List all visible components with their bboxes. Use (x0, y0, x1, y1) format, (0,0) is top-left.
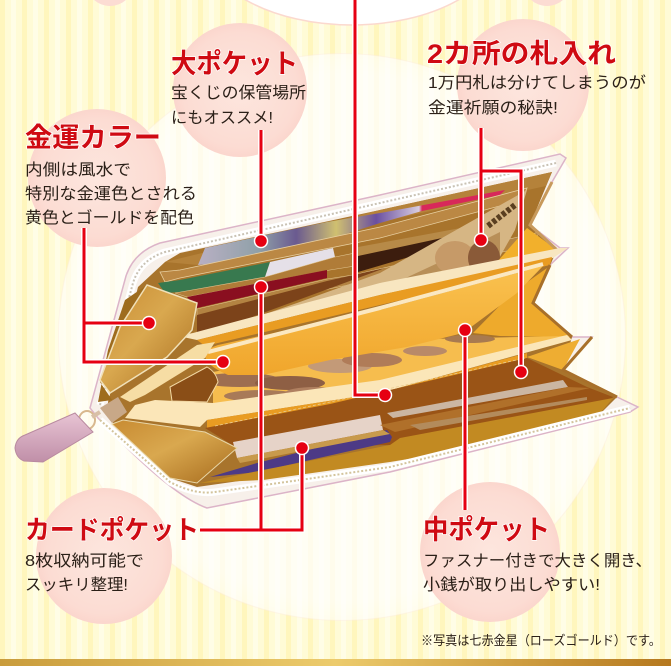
cream stripe lower (125, 335, 572, 427)
pink circle: middle pocket (420, 482, 560, 622)
orange stripe (197, 257, 552, 346)
pocket strip three (197, 232, 540, 316)
text: middle pocket: ファスナー付きで大きく開き、 (423, 552, 652, 570)
heading: card pockets: カードポケット (25, 515, 199, 545)
middle pocket cream edge (178, 248, 568, 340)
text: bill compartments: 金運祈願の秘訣! (428, 99, 558, 117)
gold flap lower (112, 420, 237, 483)
wallet outer body (90, 154, 638, 508)
pink circle: card pockets (36, 488, 172, 624)
yellow gusset upper (497, 228, 557, 262)
gold strip behind red card (175, 248, 380, 297)
callout line: card pockets (200, 280, 308, 530)
coins (200, 335, 495, 402)
lower stitching (215, 358, 525, 426)
text: card pockets (25, 552, 144, 594)
zipper pull tab (15, 411, 100, 462)
orange stripe lower (207, 353, 527, 428)
callout line: coin pocket (355, 0, 392, 402)
green card (158, 262, 270, 293)
lower yellow gusset (527, 339, 580, 370)
text: gold colour (25, 161, 197, 227)
cards (158, 248, 380, 308)
brown pocket (197, 268, 385, 335)
text: gold colour: 内側は風水で (25, 161, 131, 179)
text: card pockets: 8枚収納可能で (25, 552, 144, 570)
large white circle backdrop (58, 53, 626, 621)
top pale circle (202, 0, 502, 25)
zipper bottom (100, 408, 630, 493)
top gold lining (165, 172, 552, 265)
floral card (233, 415, 383, 458)
pocket strip one (160, 188, 527, 282)
gold lining left (98, 285, 147, 402)
pink circle: bill compartments (457, 19, 589, 151)
pink circle: gold colour (28, 109, 166, 247)
brown small pocket (170, 367, 218, 402)
grey card one (387, 380, 568, 418)
dark compartment (358, 225, 477, 263)
white card (265, 248, 335, 277)
heading: gold colour: 金運カラー (25, 123, 161, 153)
grey card two (410, 397, 587, 430)
top right pink arc (523, 0, 571, 6)
zipper bottom teeth (100, 408, 630, 493)
text: middle pocket: 小銭が取り出しやすい! (423, 576, 600, 594)
text: gold colour: 黄色とゴールドを配色 (25, 208, 194, 227)
wallet photo (15, 154, 638, 508)
callout line: large pocket (254, 130, 268, 248)
brown lower pocket (205, 358, 613, 448)
purple card (210, 430, 392, 477)
cream pocket edge (120, 342, 215, 402)
top left pink arc (86, 0, 134, 6)
text: bill compartments (428, 74, 646, 117)
text: card pockets: スッキリ整理! (25, 576, 128, 594)
text: middle pocket (423, 552, 652, 594)
lower yellow interior (213, 336, 567, 410)
zipper corner (100, 397, 127, 423)
zipper top (100, 163, 556, 405)
zipper top teeth (100, 163, 556, 405)
inner gold lining (108, 172, 617, 487)
heading: middle pocket: 中ポケット (423, 515, 550, 545)
heading: bill compartments: 2カ所の札入れ (427, 39, 616, 69)
text: large pocket (171, 84, 306, 127)
callout line: middle pocket (458, 324, 472, 510)
yellow gusset middle (473, 268, 572, 337)
pink circle: large pocket (173, 23, 307, 157)
gold flap upper (100, 285, 197, 393)
callout line: gold colour (84, 228, 230, 368)
bottom gold bar (0, 659, 671, 666)
text: large pocket: 宝くじの保管場所 (171, 84, 306, 102)
text: bill compartments: 1万円札は分けてしまうのが (428, 74, 646, 92)
text: gold colour: 特別な金運色とされる (25, 185, 197, 203)
heading: large pocket: 大ポケット (171, 49, 298, 79)
red card (187, 270, 327, 308)
upper yellow main pocket (205, 266, 543, 375)
bank notes (225, 190, 527, 332)
callout line: bill compartments (474, 128, 528, 378)
lower gold band (200, 398, 613, 483)
gold strip (380, 387, 590, 432)
lottery tickets (198, 190, 505, 265)
frame edge upper (530, 182, 557, 250)
text: large pocket: にもオススメ! (171, 109, 273, 127)
